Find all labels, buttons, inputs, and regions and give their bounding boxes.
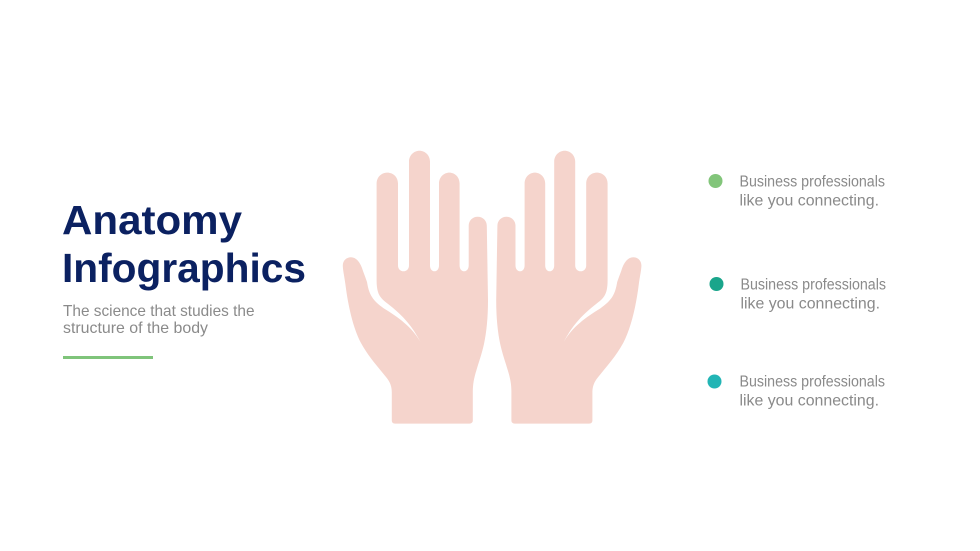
item text 2: like you connecting.	[740, 296, 880, 312]
subtitle: structure of the body	[63, 320, 208, 337]
bullet 3	[708, 374, 722, 388]
item text 3: like you connecting.	[740, 392, 879, 410]
green accent underline	[63, 356, 153, 359]
item text 2	[740, 276, 886, 312]
item text 3: Business professionals	[740, 374, 885, 390]
item text 1: like you connecting.	[740, 192, 879, 210]
icon: open hands	[343, 151, 641, 424]
bullet 2	[710, 277, 724, 291]
list item 1	[708, 174, 885, 210]
subtitle: The science that studies the	[63, 303, 255, 320]
list item 2	[710, 276, 886, 312]
icon: left hand	[343, 151, 488, 424]
item text 3	[740, 374, 885, 410]
title	[62, 197, 306, 291]
title: Infographics	[62, 245, 306, 291]
subtitle	[63, 303, 255, 337]
list item 3	[708, 374, 885, 410]
item text 2: Business professionals	[740, 276, 886, 294]
icon: right hand	[496, 151, 641, 424]
item text 1: Business professionals	[740, 174, 885, 190]
bullet 1	[708, 174, 722, 188]
item text 1	[740, 174, 885, 210]
title: Anatomy	[62, 197, 242, 243]
